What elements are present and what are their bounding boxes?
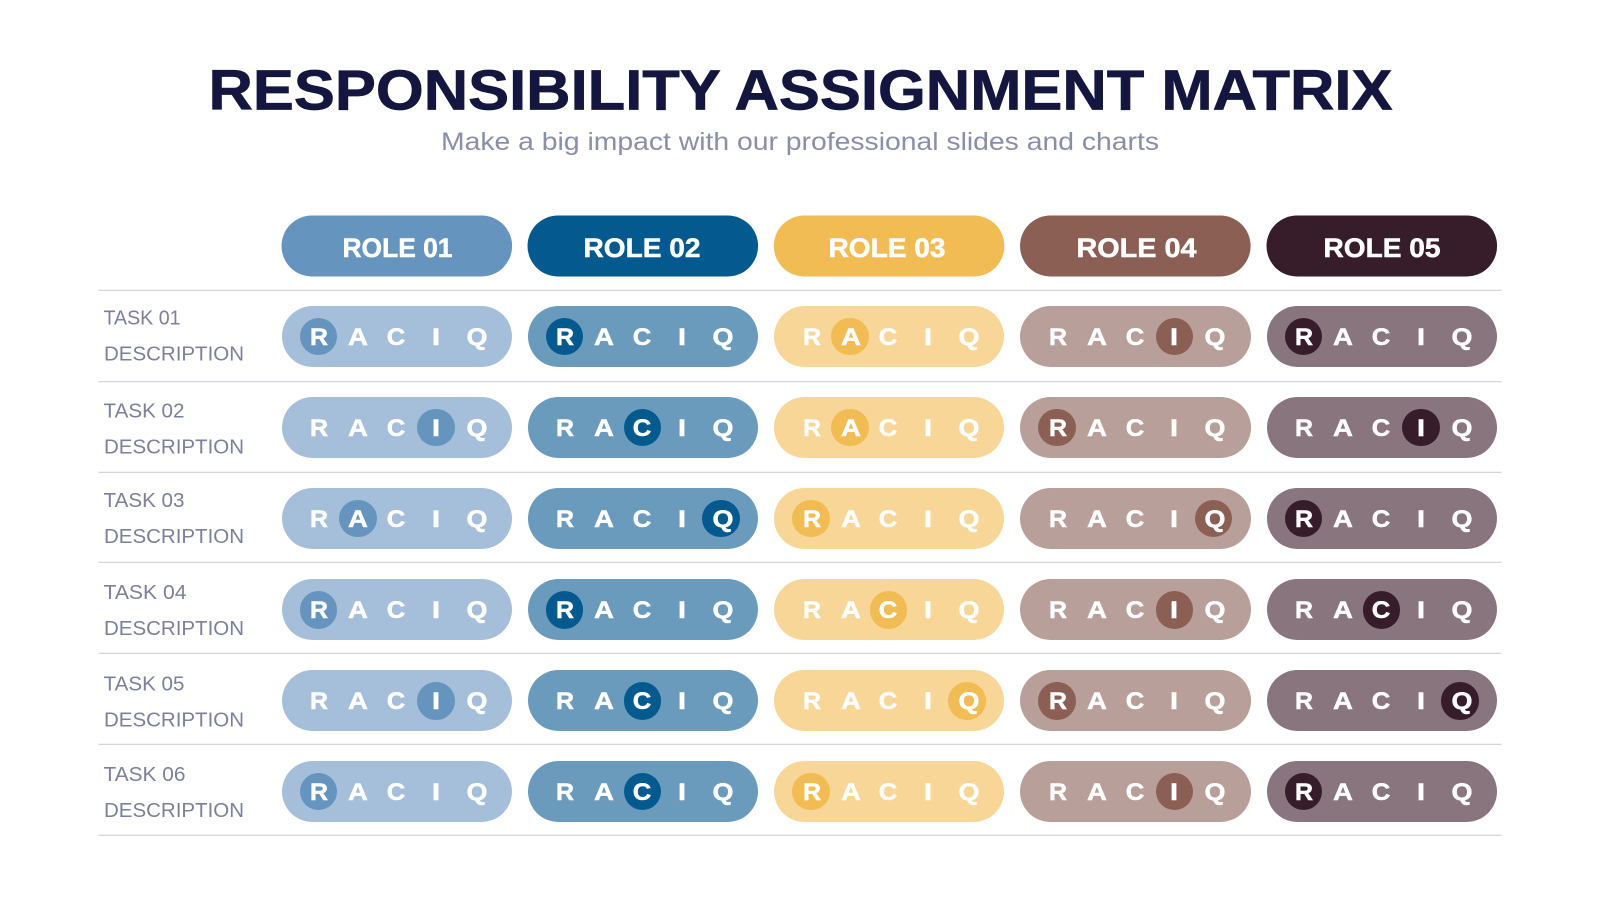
- task 04 role 02: R: Q: [712, 597, 733, 624]
- task 04 role 02: R: C: [633, 597, 651, 624]
- task 01 role 04: I: C: [1125, 324, 1144, 351]
- task 06 role 05: R: I: [1416, 779, 1424, 806]
- task 01 role 05: R: I: [1416, 324, 1424, 351]
- task 01 role 02: R: R: [556, 324, 574, 351]
- task label 03: DESCRIPTION: [104, 526, 244, 548]
- task 01 role 02: R: I: [677, 324, 685, 351]
- task 03 role 04: Q: C: [1125, 506, 1144, 533]
- task label 01: TASK 01: [104, 307, 180, 329]
- task label 04: TASK 04: [104, 582, 186, 604]
- task 02 role 05: I: C: [1372, 415, 1390, 442]
- task 04 role 03: C: C: [879, 597, 898, 624]
- task 02 role 01: I: I: [431, 415, 439, 442]
- task 06 role 04: I: I: [1170, 779, 1178, 806]
- role header 03: [774, 216, 1004, 276]
- task 01 role 03: A: C: [879, 324, 898, 351]
- task 05 role 02: C: R: [556, 688, 574, 715]
- task 05 role 01: I: C: [387, 688, 405, 715]
- task 03 role 03: R: A: [841, 506, 861, 533]
- task label 02: [104, 401, 244, 459]
- task 06 role 04: I: A: [1087, 779, 1107, 806]
- task 03 role 02: Q: I: [677, 506, 685, 533]
- task 04 role 01: R: A: [348, 597, 368, 624]
- task 03 role 04: Q: [1020, 488, 1251, 549]
- task 06 role 02: C: I: [677, 779, 685, 806]
- task 01 role 01: R: C: [387, 324, 405, 351]
- task 05 role 04: R: C: [1125, 688, 1144, 715]
- task 03 role 04: Q: A: [1087, 506, 1107, 533]
- task 01 role 05: R: R: [1295, 324, 1313, 351]
- task 05 role 02: C: A: [594, 688, 614, 715]
- task 02 role 05: I: I: [1416, 415, 1424, 442]
- task 01 role 05: R: Q: [1451, 324, 1472, 351]
- task 03 role 05: R: [1266, 488, 1497, 549]
- task label 03: TASK 03: [104, 490, 184, 512]
- task 01 role 02: R: Q: [712, 324, 733, 351]
- task 03 role 05: R: C: [1372, 506, 1390, 533]
- task 02 role 03: A: A: [841, 415, 861, 442]
- task 05 role 01: I: Q: [466, 688, 487, 715]
- task 04 role 04: I: R: [1049, 597, 1067, 624]
- task 06 role 01: R: I: [431, 779, 439, 806]
- task 04 role 03: C: A: [841, 597, 861, 624]
- task 05 role 04: R: R: [1049, 688, 1067, 715]
- task 04 role 01: R: [282, 579, 512, 640]
- task 05 role 05: Q: [1266, 670, 1497, 731]
- task label 06: DESCRIPTION: [104, 800, 244, 822]
- task 01 role 05: R: [1266, 306, 1497, 367]
- task 02 role 03: A: R: [803, 415, 821, 442]
- task 02 role 03: A: C: [879, 415, 898, 442]
- task 04 role 05: C: Q: [1451, 597, 1472, 624]
- task 06 role 01: R: Q: [466, 779, 487, 806]
- task 01 role 05: R: A: [1333, 324, 1353, 351]
- role header 02: ROLE 02: [584, 233, 700, 263]
- task 02 role 02: C: R: [556, 415, 574, 442]
- task 02 role 03: A: [774, 397, 1004, 458]
- task label 06: [104, 764, 244, 822]
- task 04 role 02: R: [528, 579, 758, 640]
- role header 05: ROLE 05: [1324, 233, 1440, 263]
- task 02 role 01: I: [282, 397, 512, 458]
- task 06 role 02: C: A: [594, 779, 614, 806]
- task 03 role 01: A: I: [431, 506, 439, 533]
- task 03 role 01: A: [282, 488, 512, 549]
- task 01 role 05: R: C: [1372, 324, 1390, 351]
- task 04 role 02: R: A: [594, 597, 614, 624]
- task 04 role 01: R: I: [431, 597, 439, 624]
- task 04 role 05: C: I: [1416, 597, 1424, 624]
- task 02 role 02: C: [528, 397, 758, 458]
- task 05 role 04: R: I: [1170, 688, 1178, 715]
- task 01 role 03: A: Q: [958, 324, 979, 351]
- task 02 role 01: I: R: [310, 415, 328, 442]
- task 06 role 04: I: C: [1125, 779, 1144, 806]
- task 01 role 04: I: I: [1170, 324, 1178, 351]
- task 06 role 02: C: Q: [712, 779, 733, 806]
- task 04 role 05: C: [1266, 579, 1497, 640]
- task 06 role 01: R: R: [310, 779, 328, 806]
- task 01 role 04: I: A: [1087, 324, 1107, 351]
- task 03 role 05: R: A: [1333, 506, 1353, 533]
- task 06 role 04: I: [1020, 761, 1251, 822]
- role header 03: ROLE 03: [828, 233, 946, 263]
- task 01 role 04: I: Q: [1205, 324, 1225, 351]
- task 06 role 01: R: C: [387, 779, 405, 806]
- task label 01: DESCRIPTION: [104, 343, 244, 365]
- task 04 role 04: I: Q: [1205, 597, 1225, 624]
- task 02 role 04: R: C: [1125, 415, 1144, 442]
- task 04 role 05: C: C: [1372, 597, 1390, 624]
- task 03 role 05: R: Q: [1451, 506, 1472, 533]
- task label 05: DESCRIPTION: [104, 710, 244, 732]
- task label 01: [104, 307, 244, 365]
- task label 04: DESCRIPTION: [104, 618, 244, 640]
- task 03 role 04: Q: R: [1049, 506, 1067, 533]
- task 03 role 02: Q: C: [633, 506, 651, 533]
- task 04 role 01: R: C: [387, 597, 405, 624]
- task 01 role 01: R: I: [431, 324, 439, 351]
- task 02 role 03: A: Q: [958, 415, 979, 442]
- task 04 role 04: I: A: [1087, 597, 1107, 624]
- task 02 role 04: R: Q: [1205, 415, 1225, 442]
- task 02 role 04: R: [1020, 397, 1251, 458]
- task label 03: [104, 490, 244, 548]
- task 03 role 05: R: R: [1295, 506, 1313, 533]
- task 06 role 01: R: [282, 761, 512, 822]
- task 05 role 01: I: I: [431, 688, 439, 715]
- task 03 role 02: Q: [528, 488, 758, 549]
- task 05 role 03: Q: I: [924, 688, 932, 715]
- task 01 role 02: R: A: [594, 324, 614, 351]
- task 02 role 05: I: R: [1295, 415, 1313, 442]
- task 04 role 05: C: A: [1333, 597, 1353, 624]
- task 05 role 02: C: Q: [712, 688, 733, 715]
- task 02 role 02: C: Q: [712, 415, 733, 442]
- task 02 role 05: I: [1266, 397, 1497, 458]
- task 06 role 04: I: Q: [1205, 779, 1225, 806]
- task 05 role 03: Q: [774, 670, 1004, 731]
- role header 02: [528, 216, 758, 276]
- task 03 role 05: R: I: [1416, 506, 1424, 533]
- task 05 role 01: I: A: [348, 688, 368, 715]
- task 03 role 02: Q: Q: [712, 506, 733, 533]
- task 04 role 01: R: Q: [466, 597, 487, 624]
- task 05 role 02: C: I: [677, 688, 685, 715]
- task 04 role 01: R: R: [310, 597, 328, 624]
- task label 04: [104, 582, 244, 640]
- task 05 role 02: C: C: [633, 688, 651, 715]
- task 04 role 04: I: I: [1170, 597, 1178, 624]
- task 06 role 05: R: A: [1333, 779, 1353, 806]
- task 03 role 03: R: I: [924, 506, 932, 533]
- task 01 role 02: R: C: [633, 324, 651, 351]
- task 06 role 03: R: Q: [958, 779, 979, 806]
- task 03 role 01: A: A: [348, 506, 368, 533]
- task 03 role 04: Q: Q: [1205, 506, 1225, 533]
- task 06 role 03: R: [774, 761, 1004, 822]
- task 03 role 01: A: Q: [466, 506, 487, 533]
- task 02 role 04: R: R: [1049, 415, 1067, 442]
- task 05 role 01: I: [282, 670, 512, 731]
- task 06 role 04: I: R: [1049, 779, 1067, 806]
- task label 05: [104, 674, 244, 732]
- task 01 role 01: R: A: [348, 324, 368, 351]
- task 03 role 02: Q: A: [594, 506, 614, 533]
- task 05 role 04: R: [1020, 670, 1251, 731]
- task 05 role 03: Q: C: [879, 688, 898, 715]
- task 01 role 04: I: [1020, 306, 1251, 367]
- task 05 role 02: C: [528, 670, 758, 731]
- task 06 role 03: R: I: [924, 779, 932, 806]
- task 03 role 03: R: [774, 488, 1004, 549]
- task 05 role 01: I: R: [310, 688, 328, 715]
- task 06 role 03: R: A: [841, 779, 861, 806]
- task 05 role 05: Q: A: [1333, 688, 1353, 715]
- task 05 role 05: Q: C: [1372, 688, 1390, 715]
- task 06 role 05: R: Q: [1451, 779, 1472, 806]
- task 02 role 01: I: Q: [466, 415, 487, 442]
- task 01 role 03: A: A: [841, 324, 861, 351]
- task 02 role 05: I: A: [1333, 415, 1353, 442]
- role header 01: ROLE 01: [342, 233, 452, 263]
- task 06 role 03: R: C: [879, 779, 898, 806]
- task 03 role 04: Q: I: [1170, 506, 1178, 533]
- task 06 role 02: C: C: [633, 779, 651, 806]
- task label 05: TASK 05: [104, 674, 184, 696]
- task 06 role 05: R: [1266, 761, 1497, 822]
- task 01 role 01: R: Q: [466, 324, 487, 351]
- task 05 role 03: Q: A: [841, 688, 861, 715]
- task 06 role 01: R: A: [348, 779, 368, 806]
- task 01 role 03: A: R: [803, 324, 821, 351]
- task 03 role 03: R: C: [879, 506, 898, 533]
- task 04 role 03: C: [774, 579, 1004, 640]
- title: RESPONSIBILITY ASSIGNMENT MATRIX: [208, 58, 1392, 122]
- task 04 role 03: C: Q: [958, 597, 979, 624]
- task 03 role 02: Q: R: [556, 506, 574, 533]
- task 04 role 04: I: C: [1125, 597, 1144, 624]
- task 05 role 03: Q: Q: [958, 688, 979, 715]
- task 04 role 03: C: R: [803, 597, 821, 624]
- task 04 role 04: I: [1020, 579, 1251, 640]
- task 02 role 04: R: I: [1170, 415, 1178, 442]
- task 02 role 01: I: A: [348, 415, 368, 442]
- subtitle: Make a big impact with our professional slides and charts: [441, 128, 1159, 156]
- task 03 role 03: R: Q: [958, 506, 979, 533]
- task 04 role 05: C: R: [1295, 597, 1313, 624]
- role header 04: ROLE 04: [1076, 233, 1196, 263]
- task 04 role 03: C: I: [924, 597, 932, 624]
- task 01 role 01: R: R: [310, 324, 328, 351]
- task 05 role 05: Q: Q: [1451, 688, 1472, 715]
- role header 05: [1266, 216, 1497, 276]
- task 06 role 02: C: [528, 761, 758, 822]
- role header 04: [1020, 216, 1251, 276]
- task 04 role 02: R: R: [556, 597, 574, 624]
- task 05 role 05: Q: I: [1416, 688, 1424, 715]
- task 03 role 03: R: R: [803, 506, 821, 533]
- task 06 role 03: R: R: [803, 779, 821, 806]
- task label 06: TASK 06: [104, 764, 186, 786]
- task 05 role 04: R: A: [1087, 688, 1107, 715]
- task 02 role 04: R: A: [1087, 415, 1107, 442]
- task 02 role 02: C: C: [633, 415, 651, 442]
- task 06 role 05: R: C: [1372, 779, 1390, 806]
- task 01 role 02: R: [528, 306, 758, 367]
- task 06 role 02: C: R: [556, 779, 574, 806]
- task 04 role 02: R: I: [677, 597, 685, 624]
- task label 02: DESCRIPTION: [104, 437, 244, 459]
- role header 01: [282, 216, 512, 276]
- task 03 role 01: A: C: [387, 506, 405, 533]
- task 02 role 02: C: I: [677, 415, 685, 442]
- task 05 role 05: Q: R: [1295, 688, 1313, 715]
- task label 02: TASK 02: [104, 401, 184, 423]
- task 06 role 05: R: R: [1295, 779, 1313, 806]
- task 02 role 01: I: C: [387, 415, 405, 442]
- task 05 role 04: R: Q: [1205, 688, 1225, 715]
- task 01 role 01: R: [282, 306, 512, 367]
- task 03 role 01: A: R: [310, 506, 328, 533]
- task 02 role 02: C: A: [594, 415, 614, 442]
- task 05 role 03: Q: R: [803, 688, 821, 715]
- task 01 role 04: I: R: [1049, 324, 1067, 351]
- task 01 role 03: A: [774, 306, 1004, 367]
- task 02 role 05: I: Q: [1451, 415, 1472, 442]
- task 02 role 03: A: I: [924, 415, 932, 442]
- task 01 role 03: A: I: [924, 324, 932, 351]
